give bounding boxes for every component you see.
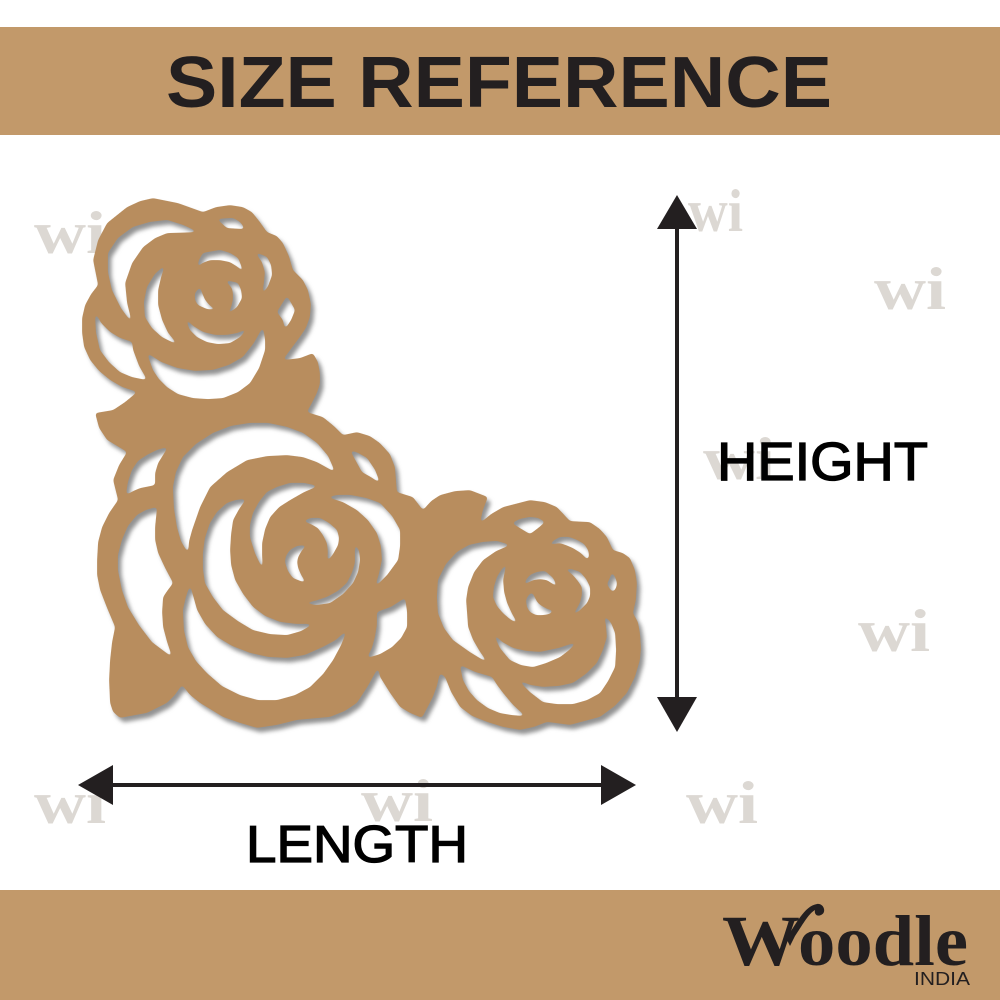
watermarks — [34, 178, 946, 836]
logo — [722, 901, 970, 989]
watermarks: wi — [688, 178, 743, 244]
title: SIZE REFERENCE — [166, 43, 832, 123]
watermarks: wi — [703, 426, 775, 492]
watermarks: wi — [686, 770, 758, 836]
watermarks: wi — [858, 598, 930, 664]
watermarks: wi — [34, 200, 106, 266]
watermarks: wi — [361, 768, 433, 834]
length label: LENGTH — [246, 816, 468, 874]
logo: oodle — [798, 901, 968, 981]
logo: W — [722, 901, 800, 981]
logo: INDIA — [914, 969, 970, 989]
length arrow — [78, 765, 636, 805]
watermarks: wi — [874, 256, 946, 322]
footer band — [0, 890, 1000, 1000]
height label: HEIGHT — [717, 432, 928, 492]
height arrow — [657, 195, 697, 732]
header band — [0, 27, 1000, 135]
rose corner cutout — [82, 198, 641, 730]
watermarks: wi — [34, 770, 106, 836]
